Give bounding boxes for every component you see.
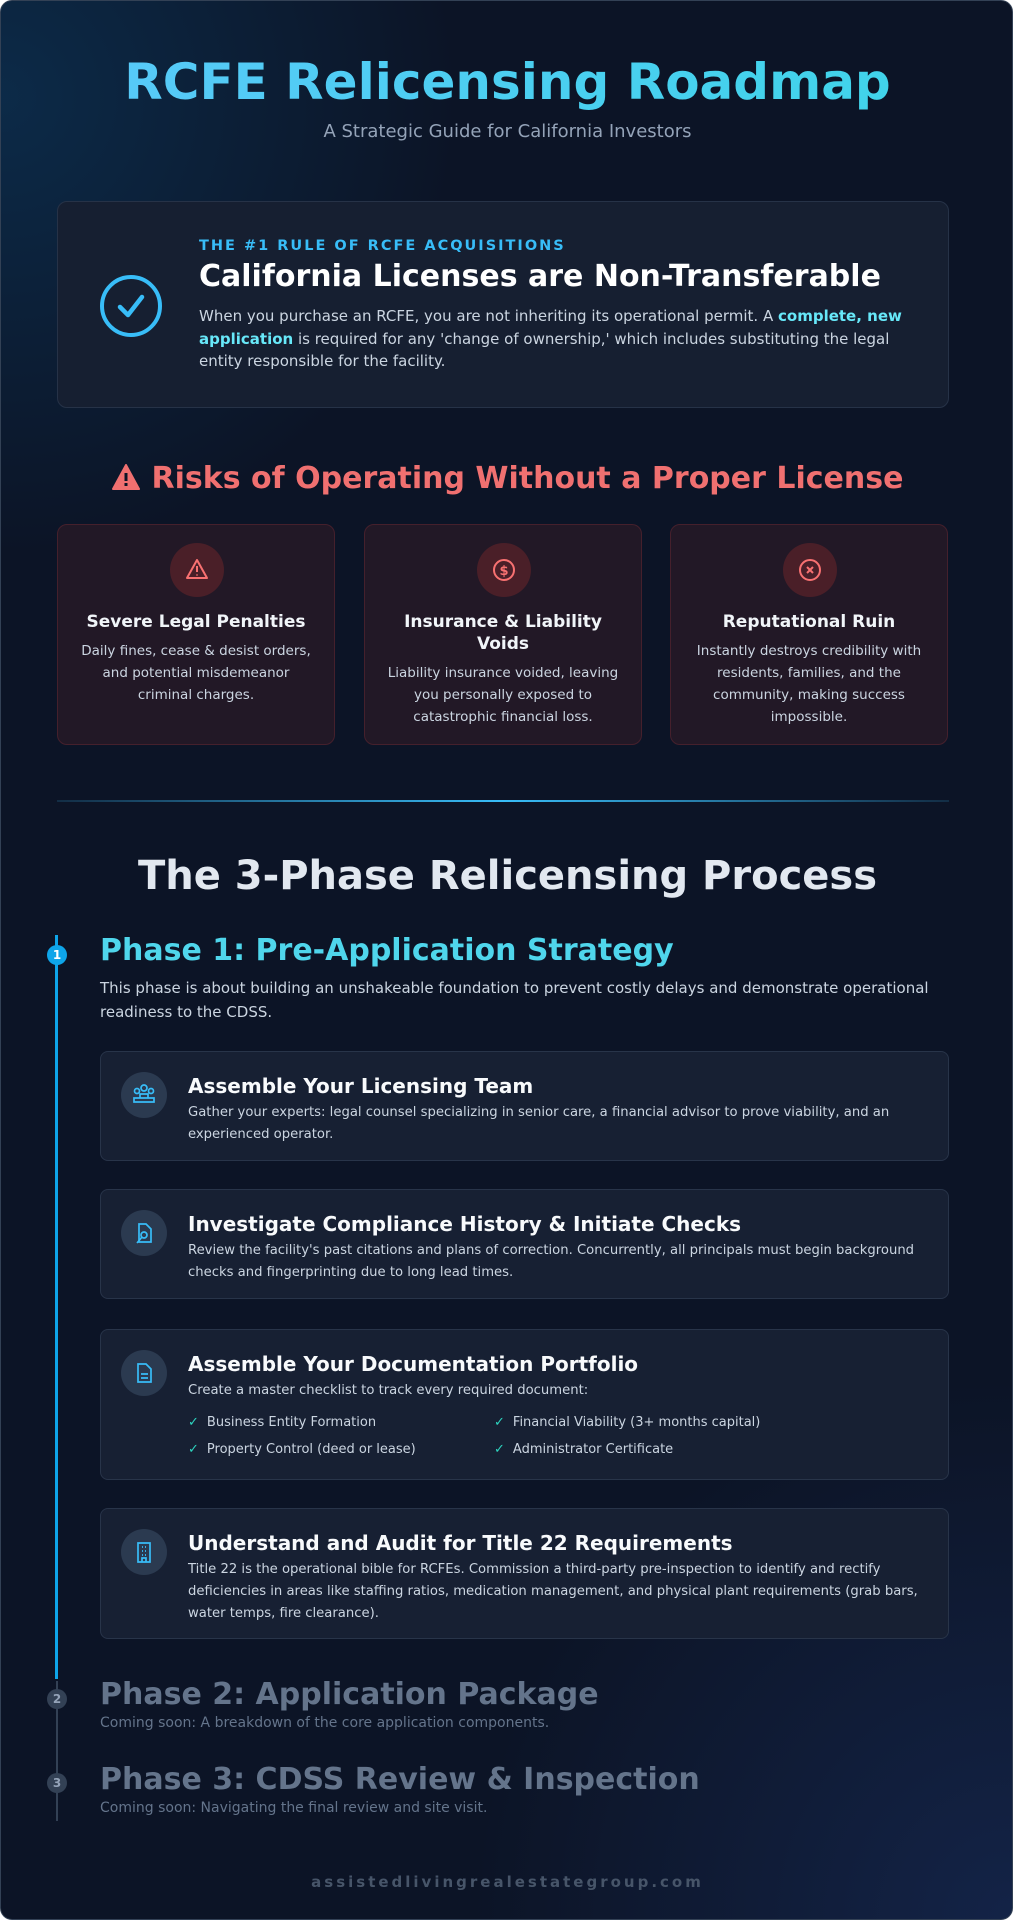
- node 1: 1: [53, 948, 61, 962]
- step: compliance: [100, 1189, 949, 1299]
- phase 2: [100, 1677, 599, 1731]
- panel: risk reputation: Instantly destroys credibility with residents, families, and the community, making success impossible.: [697, 643, 921, 725]
- icon: dollar: [477, 543, 531, 597]
- icon: check circle: [100, 275, 162, 337]
- node 2: [47, 1689, 67, 1709]
- node 3: [47, 1773, 67, 1793]
- footer: assistedlivingrealestategroup.com: [311, 1873, 704, 1891]
- node 2: 2: [53, 1692, 61, 1706]
- heading: risks: Risks of Operating Without a Proper License: [152, 461, 903, 496]
- icon: file search: [121, 1210, 167, 1256]
- panel: risk legal: Severe Legal Penalties: [87, 612, 305, 632]
- panel: risk legal: Daily fines, cease & desist orders, and potential misdemeanor criminal charges.: [81, 643, 311, 703]
- step: title 22: Understand and Audit for Title 22 Requirements: [188, 1531, 733, 1555]
- panel: risk insurance: Insurance & Liability Voids: [404, 612, 602, 654]
- timeline: [55, 935, 58, 1679]
- panel: risk legal: [57, 524, 335, 745]
- checklist: ✓ Property Control (deed or lease): [188, 1442, 416, 1457]
- phase 2: Coming soon: A breakdown of the core application components.: [100, 1715, 549, 1731]
- body text: When you purchase an RCFE, you are not inheriting its operational permit. A complete, new application is required for any 'change of ownership,' which includes substituting the legal entity responsible for the facility.: [199, 307, 902, 370]
- title: RCFE Relicensing Roadmap: [124, 53, 891, 111]
- panel: #1 rule: [57, 201, 949, 408]
- phase 1 heading: Phase 1: Pre-Application Strategy: [100, 933, 674, 968]
- icon: document: [121, 1350, 167, 1396]
- icon: dollar: $: [499, 564, 509, 579]
- checklist: ✓ Business Entity Formation: [188, 1415, 376, 1430]
- step: team: Assemble Your Licensing Team: [188, 1074, 533, 1098]
- checklist: ✓ Financial Viability (3+ months capital): [494, 1415, 760, 1430]
- step: documentation: [100, 1329, 949, 1480]
- node 3: 3: [53, 1776, 61, 1790]
- step: title 22: Title 22 is the operational bible for RCFEs. Commission a third-party pre-inspection to identify and rectify deficiencies in areas like staffing ratios, medication management, and physical plant requirements (grab bars, water temps, fire clearance).: [188, 1562, 918, 1621]
- icon: building: [121, 1529, 167, 1575]
- step: compliance: Investigate Compliance History & Initiate Checks: [188, 1212, 741, 1236]
- heading: process: The 3-Phase Relicensing Process: [138, 853, 877, 899]
- checklist: [188, 1415, 760, 1457]
- step: team: Gather your experts: legal counsel specializing in senior care, a financial advisor to prove viability, and an experienced operator.: [188, 1105, 889, 1142]
- node 1: [47, 945, 67, 965]
- phase 3: Coming soon: Navigating the final review and site visit.: [100, 1800, 487, 1816]
- panel: risk insurance: [364, 524, 642, 745]
- heading: California Licenses are Non-Transferable: [199, 259, 881, 294]
- step: team: [100, 1051, 949, 1161]
- panel: risk reputation: Reputational Ruin: [723, 612, 895, 632]
- subtitle: A Strategic Guide for California Investors: [323, 121, 692, 142]
- phase 2: Phase 2: Application Package: [100, 1677, 599, 1712]
- step: compliance: Review the facility's past citations and plans of correction. Concurrently, all principals must begin background checks and fingerprinting due to long lead times.: [188, 1243, 914, 1280]
- step: documentation: Create a master checklist to track every required document:: [188, 1383, 588, 1398]
- checklist: ✓ Administrator Certificate: [494, 1442, 673, 1457]
- icon: team: [121, 1072, 167, 1118]
- panel: risk reputation: [670, 524, 948, 745]
- phase 3: Phase 3: CDSS Review & Inspection: [100, 1762, 700, 1797]
- label: THE #1 RULE OF RCFE ACQUISITIONS: [199, 238, 566, 254]
- phase 1 description: This phase is about building an unshakeable foundation to prevent costly delays and demonstrate operational readiness to the CDSS.: [100, 979, 929, 1021]
- step: title 22: [100, 1508, 949, 1639]
- icon: warning: [170, 543, 224, 597]
- icon: x circle: [783, 543, 837, 597]
- step: documentation: Assemble Your Documentation Portfolio: [188, 1352, 638, 1376]
- panel: risk insurance: Liability insurance voided, leaving you personally exposed to catastrophic financial loss.: [388, 665, 618, 725]
- phase 3: [100, 1762, 700, 1816]
